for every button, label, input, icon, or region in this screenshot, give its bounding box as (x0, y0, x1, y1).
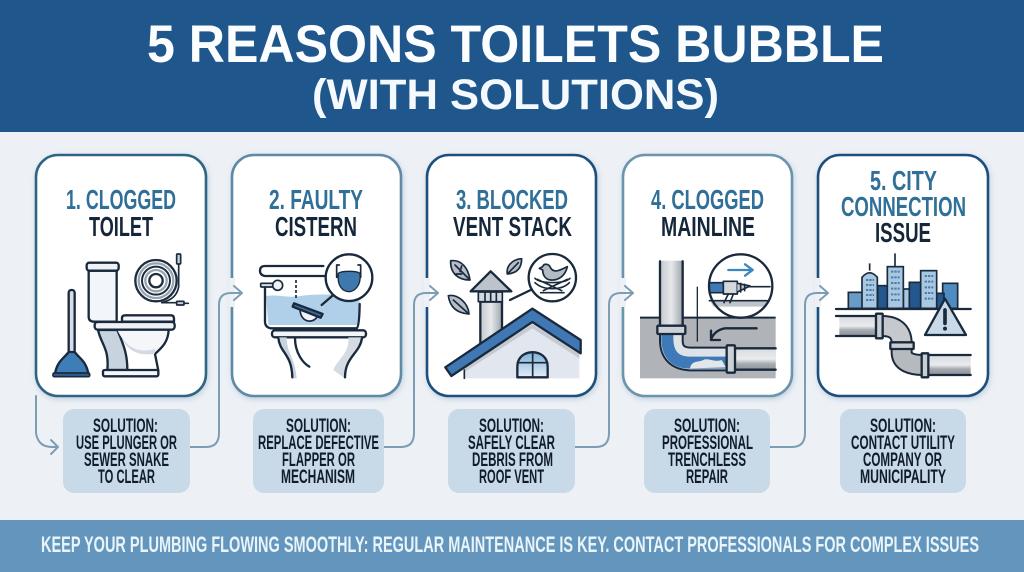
title line 2: (WITH SOLUTIONS) (312, 71, 719, 119)
arrow: solution 3 to step 4 (575, 286, 633, 447)
panel: step 2 faulty cistern (232, 155, 401, 396)
arrow: solution 1 to step 2 (190, 286, 242, 447)
solution box 3: SAFELY CLEAR (468, 433, 555, 454)
solution box 2: FLAPPER OR (282, 450, 355, 471)
icon: toilet, plunger and sewer snake (53, 254, 188, 377)
arrow: solution 2 to step 3 (384, 286, 438, 447)
heading: clogged mainline (651, 184, 764, 242)
heading: clogged mainline: 4. CLOGGED (651, 184, 764, 215)
solution box 5: SOLUTION: (870, 416, 936, 437)
solution box 1: SEWER SNAKE (84, 450, 169, 471)
panel: step 4 clogged mainline (623, 155, 792, 396)
solution box 3: DEBRIS FROM (472, 450, 553, 471)
icon: roof vent with leaves and bird nest (445, 254, 581, 378)
arrow: into solution 1 (36, 396, 58, 454)
heading: city connection issue: CONNECTION (841, 191, 966, 222)
header banner (0, 0, 1024, 132)
icon: underground mainline pipe with blockage (640, 254, 776, 378)
heading: faulty cistern: 2. FAULTY (269, 184, 363, 215)
heading: clogged toilet (66, 184, 176, 242)
solution box 4 (644, 409, 770, 493)
solution box 2 (253, 409, 384, 493)
solution box 4: PROFESSIONAL (662, 433, 753, 454)
heading: blocked vent stack: 3. BLOCKED (456, 184, 568, 215)
panel: step 1 clogged toilet (36, 155, 206, 396)
solution box 2: MECHANISM (281, 467, 355, 488)
heading: city connection issue: ISSUE (875, 217, 931, 248)
solution box 3: ROOF VENT (479, 467, 544, 488)
solution box 2: REPLACE DEFECTIVE (258, 433, 379, 454)
heading: clogged toilet: 1. CLOGGED (66, 184, 176, 215)
heading: faulty cistern: CISTERN (275, 211, 357, 242)
title line 1: 5 REASONS TOILETS BUBBLE (147, 15, 884, 74)
solution box 5: COMPANY OR (863, 450, 942, 471)
panel: step 3 blocked vent stack (427, 155, 596, 396)
heading: city connection issue: 5. CITY (870, 165, 937, 196)
solution box 1: SOLUTION: (93, 416, 158, 437)
arrow: solution 4 to step 5 (770, 286, 828, 447)
solution box 5 (840, 409, 966, 493)
solution box 5: CONTACT UTILITY (851, 433, 955, 454)
solution box 3 (448, 409, 575, 493)
icon: city skyline, pipes and warning sign (836, 253, 971, 377)
heading: city connection issue (841, 165, 966, 248)
icon: cistern with flapper (260, 254, 372, 378)
solution box 1: USE PLUNGER OR (76, 433, 177, 454)
heading: clogged mainline: MAINLINE (661, 211, 755, 242)
solution box 4: TRENCHLESS (668, 450, 746, 471)
solution box 4: SOLUTION: (674, 416, 740, 437)
heading: clogged toilet: TOILET (89, 211, 153, 242)
heading: blocked vent stack (453, 184, 572, 242)
panel: step 5 city connection issue (818, 155, 988, 396)
heading: blocked vent stack: VENT STACK (453, 211, 572, 242)
footer banner (0, 520, 1024, 572)
solution box 2: SOLUTION: (286, 416, 351, 437)
solution box 3: SOLUTION: (479, 416, 544, 437)
heading: faulty cistern (269, 184, 363, 242)
solution box 5: MUNICIPALITY (860, 467, 946, 488)
solution box 4: REPAIR (686, 467, 728, 488)
solution box 1: TO CLEAR (98, 467, 155, 488)
solution box 1 (63, 409, 190, 493)
connector gaps in card borders (229, 278, 821, 307)
